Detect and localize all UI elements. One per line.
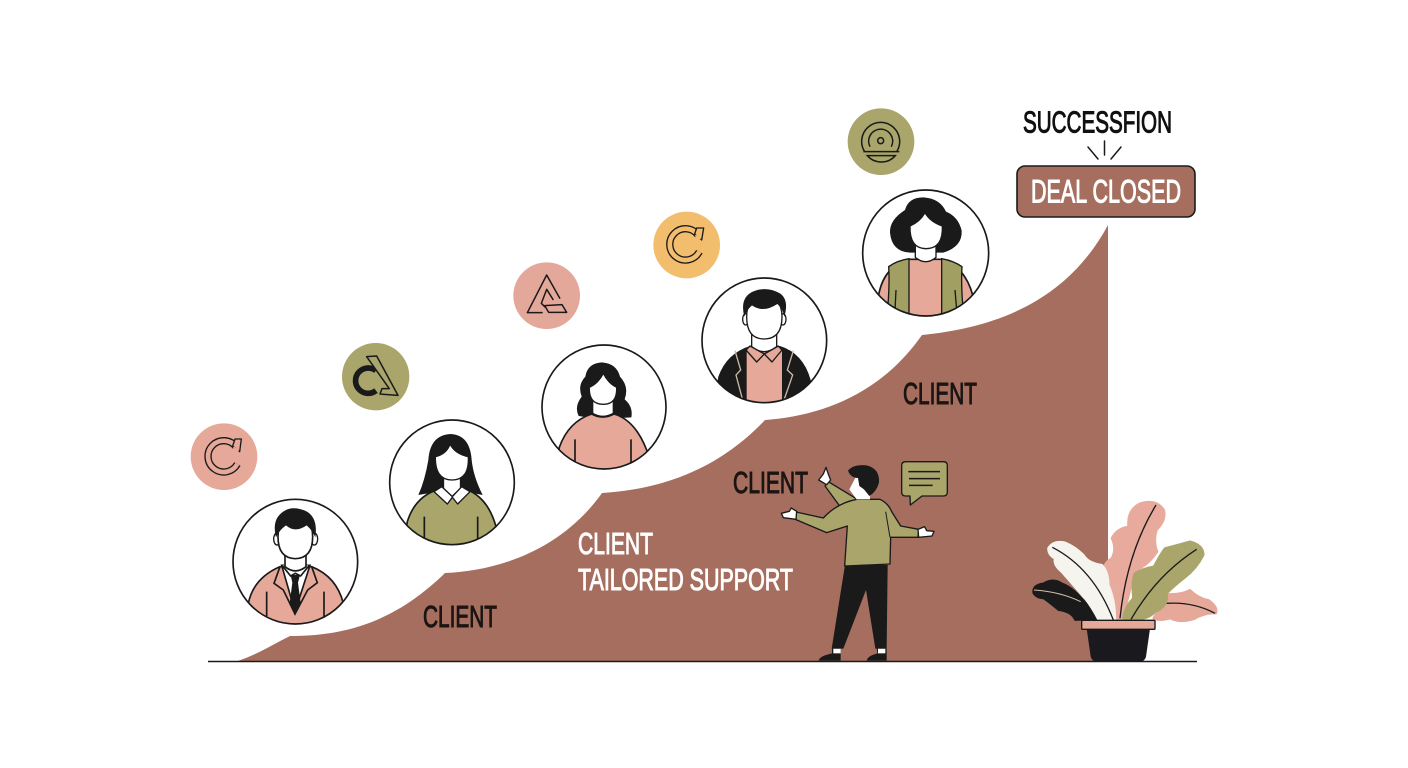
icon: orange C badge <box>653 212 720 278</box>
white leaf <box>1048 542 1115 619</box>
icon: success sparks <box>1088 141 1121 159</box>
head <box>849 477 870 499</box>
raised arm <box>825 482 857 507</box>
portrait: woman with long hair in olive sweater <box>390 420 514 547</box>
pink low leaf <box>1153 590 1216 621</box>
growth curve hill <box>238 225 1108 661</box>
label: client 4: CLIENT <box>903 376 977 411</box>
label: client 1: CLIENT <box>423 599 497 634</box>
presenter figure <box>781 465 934 661</box>
shoes and socks <box>819 649 887 661</box>
portrait: man in black jacket <box>702 278 827 407</box>
label: client 3: CLIENT <box>733 465 808 500</box>
heading: successfion: SUCCESSFION <box>1023 104 1172 140</box>
portrait: man in pink suit <box>233 499 358 627</box>
label: tailored support: TAILORED SUPPORT <box>578 562 793 597</box>
icon: olive C and triangle badge <box>342 343 409 410</box>
pot body <box>1087 629 1150 662</box>
potted plant <box>1033 502 1216 662</box>
portrait: woman with wavy hair in pink sweater <box>542 345 666 473</box>
portrait: woman with bob hair and olive cardigan <box>863 190 989 320</box>
baseline <box>208 660 1197 662</box>
torso and arms <box>795 499 919 566</box>
pot rim <box>1082 620 1155 629</box>
badge: deal closed: DEAL CLOSED <box>1031 174 1181 210</box>
icon: speech bubble <box>902 462 947 505</box>
icon: olive disc badge <box>848 108 914 175</box>
hands <box>781 508 797 519</box>
infographic canvas <box>190 108 1218 662</box>
black leaf <box>1033 580 1102 620</box>
icon: pink triangle badge <box>513 262 580 329</box>
icon: pink C badge <box>191 423 257 490</box>
trousers <box>832 565 888 649</box>
olive leaf <box>1123 542 1203 620</box>
pink tall leaf <box>1103 502 1165 619</box>
label: client 2: CLIENT <box>578 526 653 561</box>
badge: deal closed <box>1017 166 1195 217</box>
